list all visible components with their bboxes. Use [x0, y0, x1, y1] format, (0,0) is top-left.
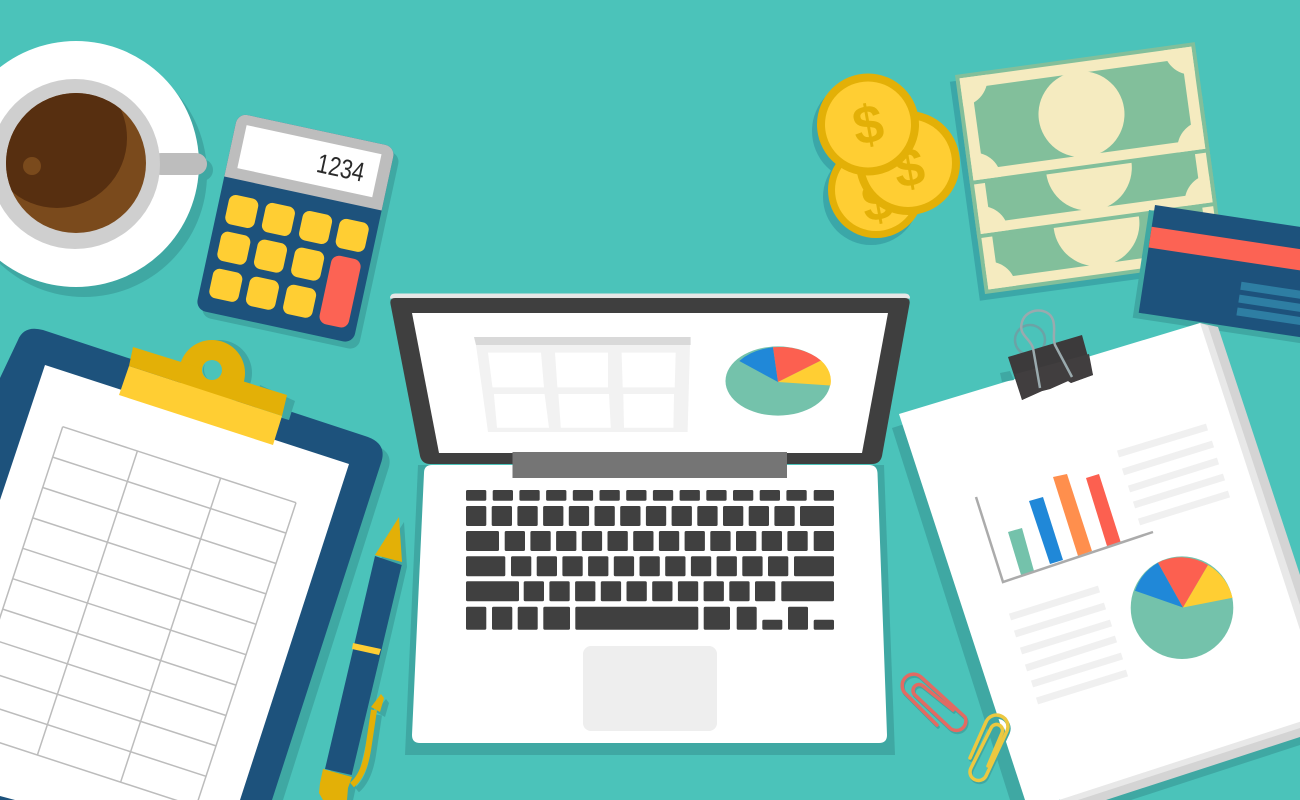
stacked dollar coins: $	[889, 136, 929, 200]
pen	[319, 517, 407, 800]
spreadsheet on screen	[474, 337, 691, 432]
pie chart on screen	[726, 346, 831, 416]
keyboard	[466, 490, 834, 630]
credit card	[1133, 205, 1300, 348]
stacked dollar coins: $	[857, 170, 897, 234]
calculator display number: 1234	[314, 148, 367, 188]
laptop screen	[390, 294, 910, 464]
laptop hinge	[512, 452, 787, 478]
laptop base	[405, 465, 895, 755]
report document with binder clip	[892, 310, 1300, 800]
pen shadow	[328, 522, 407, 800]
trackpad	[583, 646, 717, 731]
text lines lower	[1010, 589, 1127, 701]
stacked dollar coins	[812, 74, 960, 245]
clipboard clip	[119, 340, 295, 445]
coffee cup on saucer	[0, 41, 213, 297]
bar chart	[976, 474, 1153, 582]
pie chart	[1131, 556, 1233, 659]
report page	[899, 323, 1300, 800]
text lines upper	[1118, 427, 1229, 522]
calculator	[196, 113, 400, 350]
red paperclip	[902, 674, 967, 732]
stack of banknotes	[928, 15, 1252, 321]
yellow paperclip	[970, 715, 1009, 782]
binder clip	[1000, 310, 1093, 400]
stacked dollar coins: $	[848, 93, 888, 157]
clipboard with ruled table	[0, 329, 390, 800]
table grid	[0, 427, 296, 800]
laptop	[390, 294, 910, 755]
clipboard paper	[0, 365, 349, 800]
